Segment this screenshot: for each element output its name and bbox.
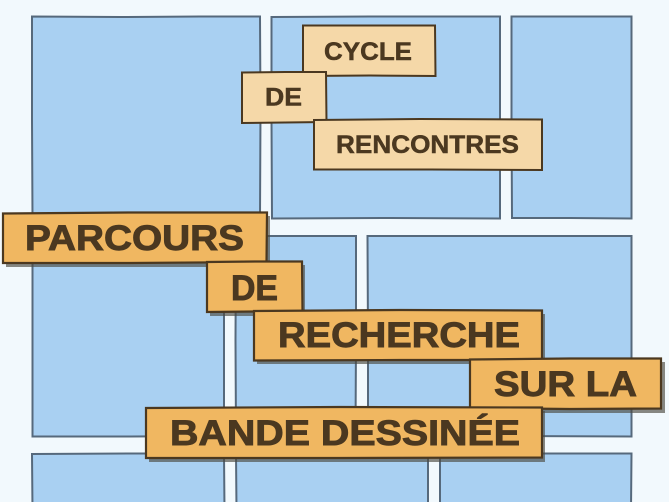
panel: top right bbox=[512, 16, 632, 218]
label: bande dessinée bbox=[146, 407, 545, 462]
label: rencontres: RENCONTRES bbox=[336, 131, 519, 159]
label: cycle: CYCLE bbox=[324, 38, 412, 66]
label: parcours: PARCOURS bbox=[25, 219, 244, 258]
label: parcours bbox=[3, 212, 270, 267]
label: de: DE bbox=[265, 84, 302, 112]
panel: middle left bbox=[32, 236, 224, 436]
panel: middle right bbox=[368, 236, 632, 436]
label: sur la bbox=[470, 358, 665, 413]
panel: top left bbox=[32, 16, 260, 218]
label: cycle bbox=[303, 26, 436, 76]
label: recherche: RECHERCHE bbox=[278, 316, 520, 355]
panel: top centre bbox=[272, 16, 500, 218]
panel: bottom left bbox=[32, 454, 224, 502]
label: de: DE bbox=[231, 269, 278, 308]
label: de bbox=[207, 262, 305, 316]
main title: parcours de recherche sur la bande dessinée bbox=[3, 212, 665, 462]
panel: middle centre bbox=[236, 236, 356, 436]
panel: bottom right bbox=[440, 454, 632, 502]
label: rencontres bbox=[314, 119, 542, 170]
label: sur la: SUR LA bbox=[494, 365, 637, 404]
label: bande dessinée: BANDE DESSINÉE bbox=[170, 413, 520, 453]
subtitle: cycle de rencontres bbox=[242, 26, 542, 170]
label: de bbox=[242, 72, 326, 123]
panel: bottom centre bbox=[236, 454, 428, 502]
label: recherche bbox=[254, 310, 545, 364]
